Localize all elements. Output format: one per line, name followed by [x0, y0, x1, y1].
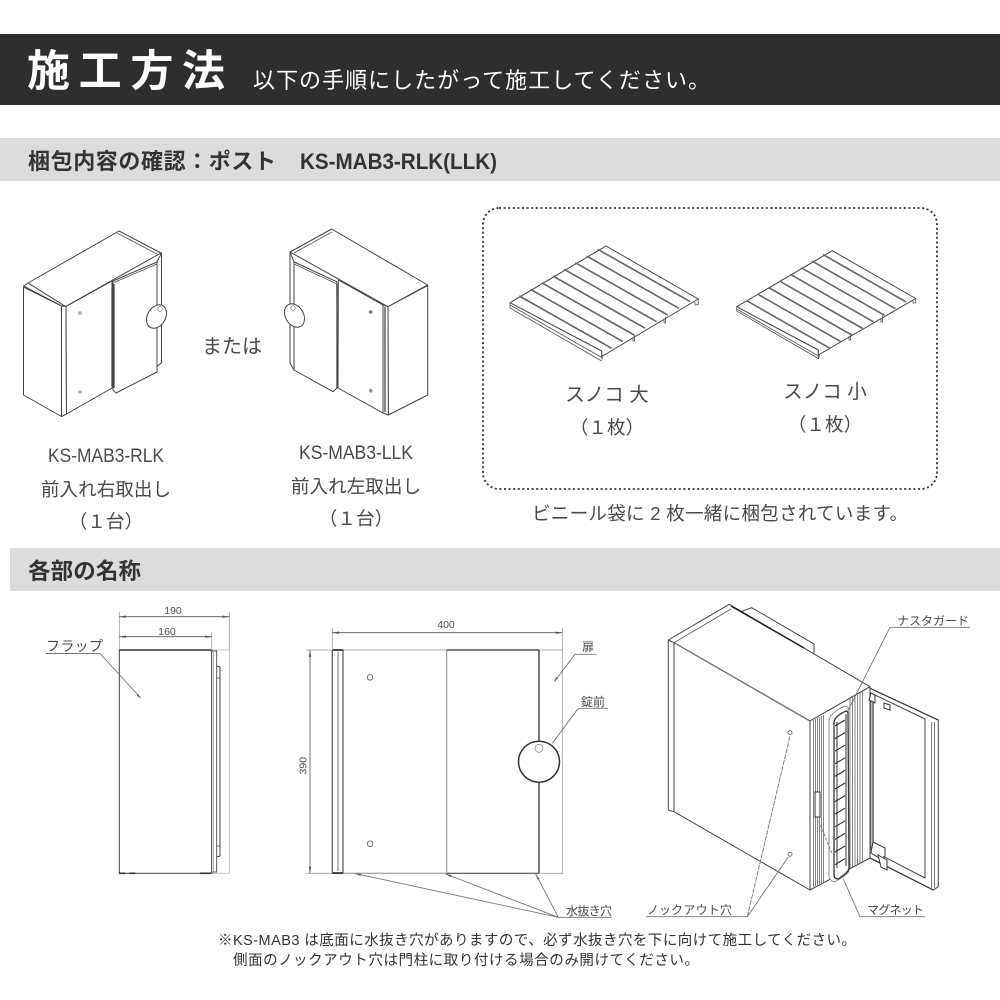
callout: ノックアウト穴 — [646, 736, 790, 917]
callout: 錠前: 錠前 — [581, 694, 605, 709]
footnote: 側面のノックアウト穴は門柱に取り付ける場合のみ開けてください。 — [233, 952, 699, 969]
callout: 水抜き穴: 水抜き穴 — [566, 904, 612, 918]
callout: 扉 — [554, 640, 597, 682]
label: KS-MAB3-LLK — [291, 443, 421, 529]
label: slat small: （１枚） — [788, 414, 862, 435]
illustration: mailbox right-opening — [24, 231, 171, 416]
panel: slat accessories — [483, 208, 937, 489]
label: KS-MAB3-RLK: （１台） — [69, 511, 143, 532]
dimension: 390: 390 — [298, 757, 310, 774]
title banner: 以下の手順にしたがって施工してください。 — [253, 68, 710, 93]
label: slat small — [783, 381, 867, 435]
slat small — [737, 251, 916, 359]
callout: マグネット: マグネット — [867, 903, 924, 917]
callout: ノックアウト穴: ノックアウト穴 — [647, 903, 732, 917]
label: slat large: スノコ 大 — [565, 384, 649, 406]
nasta guard — [829, 706, 849, 882]
magnet — [815, 792, 820, 817]
label: slat large: （１枚） — [570, 417, 644, 438]
label: KS-MAB3-LLK: 前入れ左取出し — [291, 476, 421, 497]
label: KS-MAB3-RLK: 前入れ右取出し — [41, 479, 171, 500]
rear plate — [740, 608, 814, 654]
label: KS-MAB3-LLK: KS-MAB3-LLK — [299, 443, 413, 464]
label: slat large — [565, 384, 649, 438]
illustration: mailbox left-opening — [280, 229, 428, 415]
heading: part names — [10, 548, 1000, 591]
box body — [668, 604, 870, 890]
heading: package contents — [0, 138, 1000, 181]
title banner — [0, 34, 1000, 105]
dimension: 190: 190 — [164, 605, 182, 617]
footnote — [218, 932, 856, 969]
heading: part names: 各部の名称 — [28, 559, 141, 584]
footnote: ※KS-MAB3 は底面に水抜き穴がありますので、必ず水抜き穴を下に向けて施工してください。 — [218, 932, 856, 949]
callout: 水抜き穴 — [355, 874, 612, 918]
callout: 錠前 — [552, 694, 608, 743]
heading: package contents: 梱包内容の確認：ポスト — [28, 149, 276, 174]
knockout holes iso — [788, 731, 792, 856]
callout: 扉: 扉 — [582, 640, 594, 654]
dimension: 400: 400 — [437, 619, 455, 631]
slat large — [510, 246, 698, 361]
callout: ナスタガード — [848, 614, 970, 710]
callout: フラップ: フラップ — [46, 638, 103, 654]
knockout holes front — [367, 674, 373, 846]
note: packed together: ビニール袋に 2 枚一緒に梱包されています。 — [532, 503, 908, 524]
dimension: 190 — [119, 605, 229, 650]
label: KS-MAB3-RLK: KS-MAB3-RLK — [48, 446, 164, 467]
dimension: 160: 160 — [158, 626, 176, 638]
callout: マグネット — [818, 820, 925, 917]
heading: package contents: KS-MAB3-RLK(LLK) — [300, 149, 497, 174]
dimension: 160 — [119, 626, 212, 650]
diagram: front elevation — [298, 619, 612, 918]
ventilation stripes — [814, 692, 862, 887]
callout: フラップ — [46, 638, 141, 698]
label: KS-MAB3-LLK: （１台） — [319, 508, 393, 529]
label: slat small: スノコ 小 — [783, 381, 867, 403]
diagram: side elevation — [46, 605, 229, 873]
label: または: または — [202, 336, 262, 358]
callout: ナスタガード: ナスタガード — [897, 614, 969, 628]
lock dial — [518, 741, 560, 782]
diagram: isometric open mailbox — [646, 604, 970, 917]
open door — [869, 688, 938, 890]
title banner: 施工方法 — [27, 48, 225, 96]
label: KS-MAB3-RLK — [41, 446, 171, 532]
